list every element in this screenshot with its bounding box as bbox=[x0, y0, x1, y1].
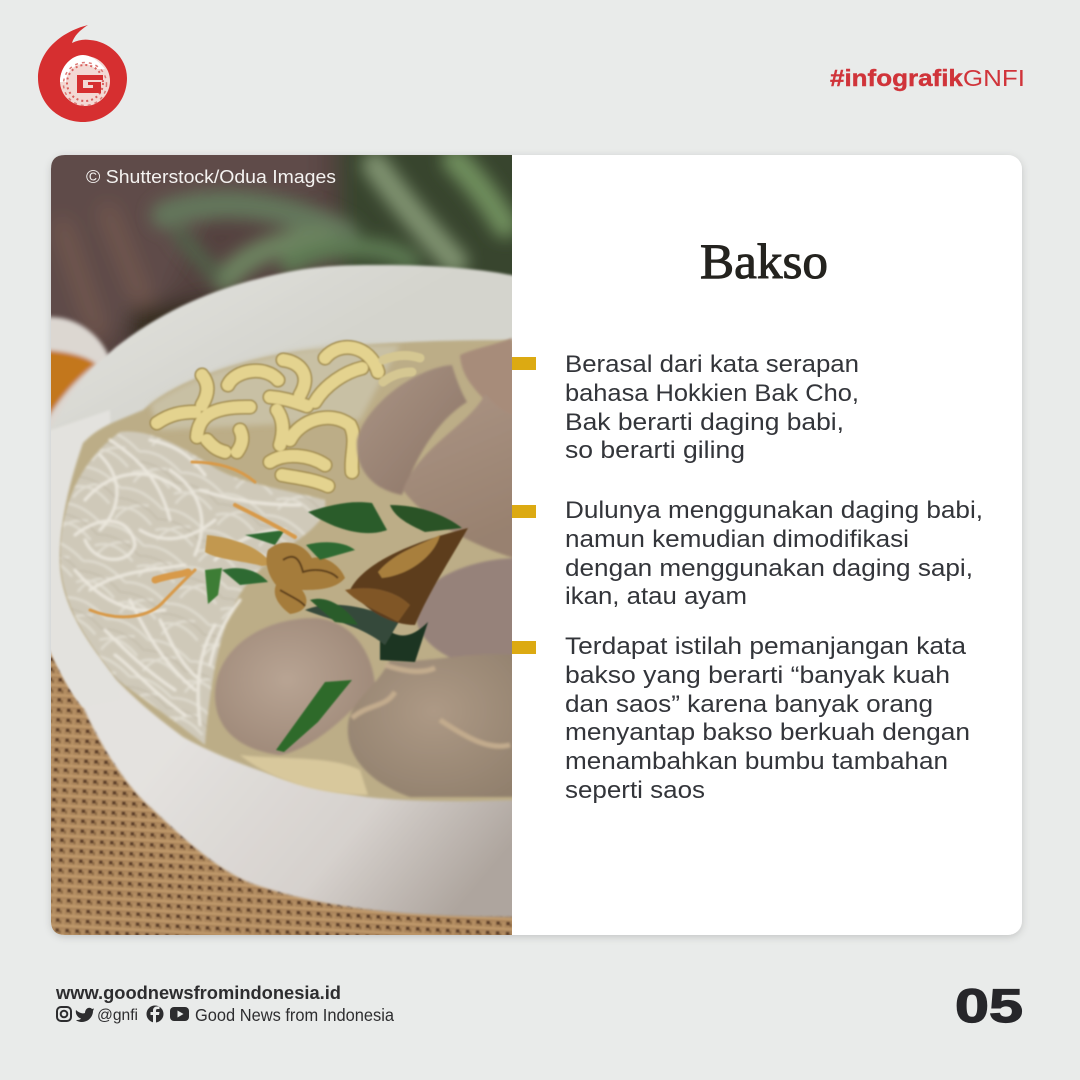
social page name: Good News from Indonesia bbox=[195, 1005, 394, 1025]
white bowl lower body bbox=[51, 648, 512, 918]
text block: point 3: menambahkan bumbu tambahan bbox=[565, 748, 948, 775]
gray broth behind noodles bbox=[150, 345, 400, 430]
text block: point 2: namun kemudian dimodifikasi bbox=[565, 526, 909, 553]
panel: food photo illustration of a bowl of bakso bbox=[0, 130, 540, 945]
text block: point 3: dan saos” karena banyak orang bbox=[565, 691, 933, 718]
footer website url: www.goodnewsfromindonesia.id bbox=[55, 983, 341, 1003]
fried shallots and herbs garnish bbox=[205, 502, 468, 662]
text block: point 3: Terdapat istilah pemanjangan kata bbox=[565, 633, 967, 660]
text block: point 2: dengan menggunakan daging sapi, bbox=[565, 555, 973, 582]
icon: youtube bbox=[170, 1007, 189, 1021]
broth surface bbox=[60, 340, 520, 801]
text block: point 3: bakso yang berarti “banyak kuah bbox=[565, 662, 950, 689]
burlap placemat texture bbox=[51, 650, 512, 935]
page number: 05 bbox=[955, 979, 1023, 1032]
social handle: @gnfi bbox=[97, 1007, 138, 1024]
text block: point 1: so berarti giling bbox=[565, 437, 745, 464]
bullet marker 3 bbox=[512, 641, 536, 654]
text block: point 3: seperti saos bbox=[565, 777, 705, 804]
photo credit: © Shutterstock/Odua Images bbox=[86, 167, 336, 187]
text block: point 1: Bak berarti daging babi, bbox=[565, 409, 844, 436]
text block: point 2 bbox=[565, 497, 983, 610]
photo backdrop: wooden table bbox=[51, 155, 512, 356]
text block: point 3: menyantap bakso berkuah dengan bbox=[565, 719, 970, 746]
small side bowl with orange sauce bbox=[51, 314, 110, 430]
bowl bright left edge bbox=[51, 412, 110, 708]
icon: twitter bbox=[76, 1008, 94, 1022]
bullet marker 1 bbox=[512, 357, 536, 370]
card: white content panel with shadow bbox=[51, 155, 1022, 935]
text block: point 3 bbox=[565, 633, 970, 804]
text block: point 1: Berasal dari kata serapan bbox=[565, 351, 859, 378]
bullet marker 2 bbox=[512, 505, 536, 518]
logo: GNFI red six emblem bbox=[38, 25, 127, 122]
text block: point 1 bbox=[565, 351, 859, 464]
meatballs bbox=[215, 338, 520, 797]
white bowl upper rim and inner wall bbox=[91, 263, 512, 426]
text block: point 1: bahasa Hokkien Bak Cho, bbox=[565, 380, 859, 407]
vermicelli rice noodles bbox=[60, 431, 325, 745]
icon: instagram bbox=[57, 1007, 71, 1021]
text block: point 2: Dulunya menggunakan daging babi, bbox=[565, 497, 983, 524]
hashtag heading: #infografik GNFI bbox=[830, 65, 1025, 91]
herb strip on meatball bbox=[276, 680, 352, 752]
yellow egg noodles bbox=[157, 347, 420, 486]
text block: point 2: ikan, atau ayam bbox=[565, 583, 747, 610]
photo backdrop: blurred green vegetables bbox=[165, 160, 505, 280]
orange shallot threads bbox=[90, 462, 295, 617]
icon: facebook bbox=[146, 1006, 164, 1023]
title: Bakso bbox=[700, 233, 828, 289]
